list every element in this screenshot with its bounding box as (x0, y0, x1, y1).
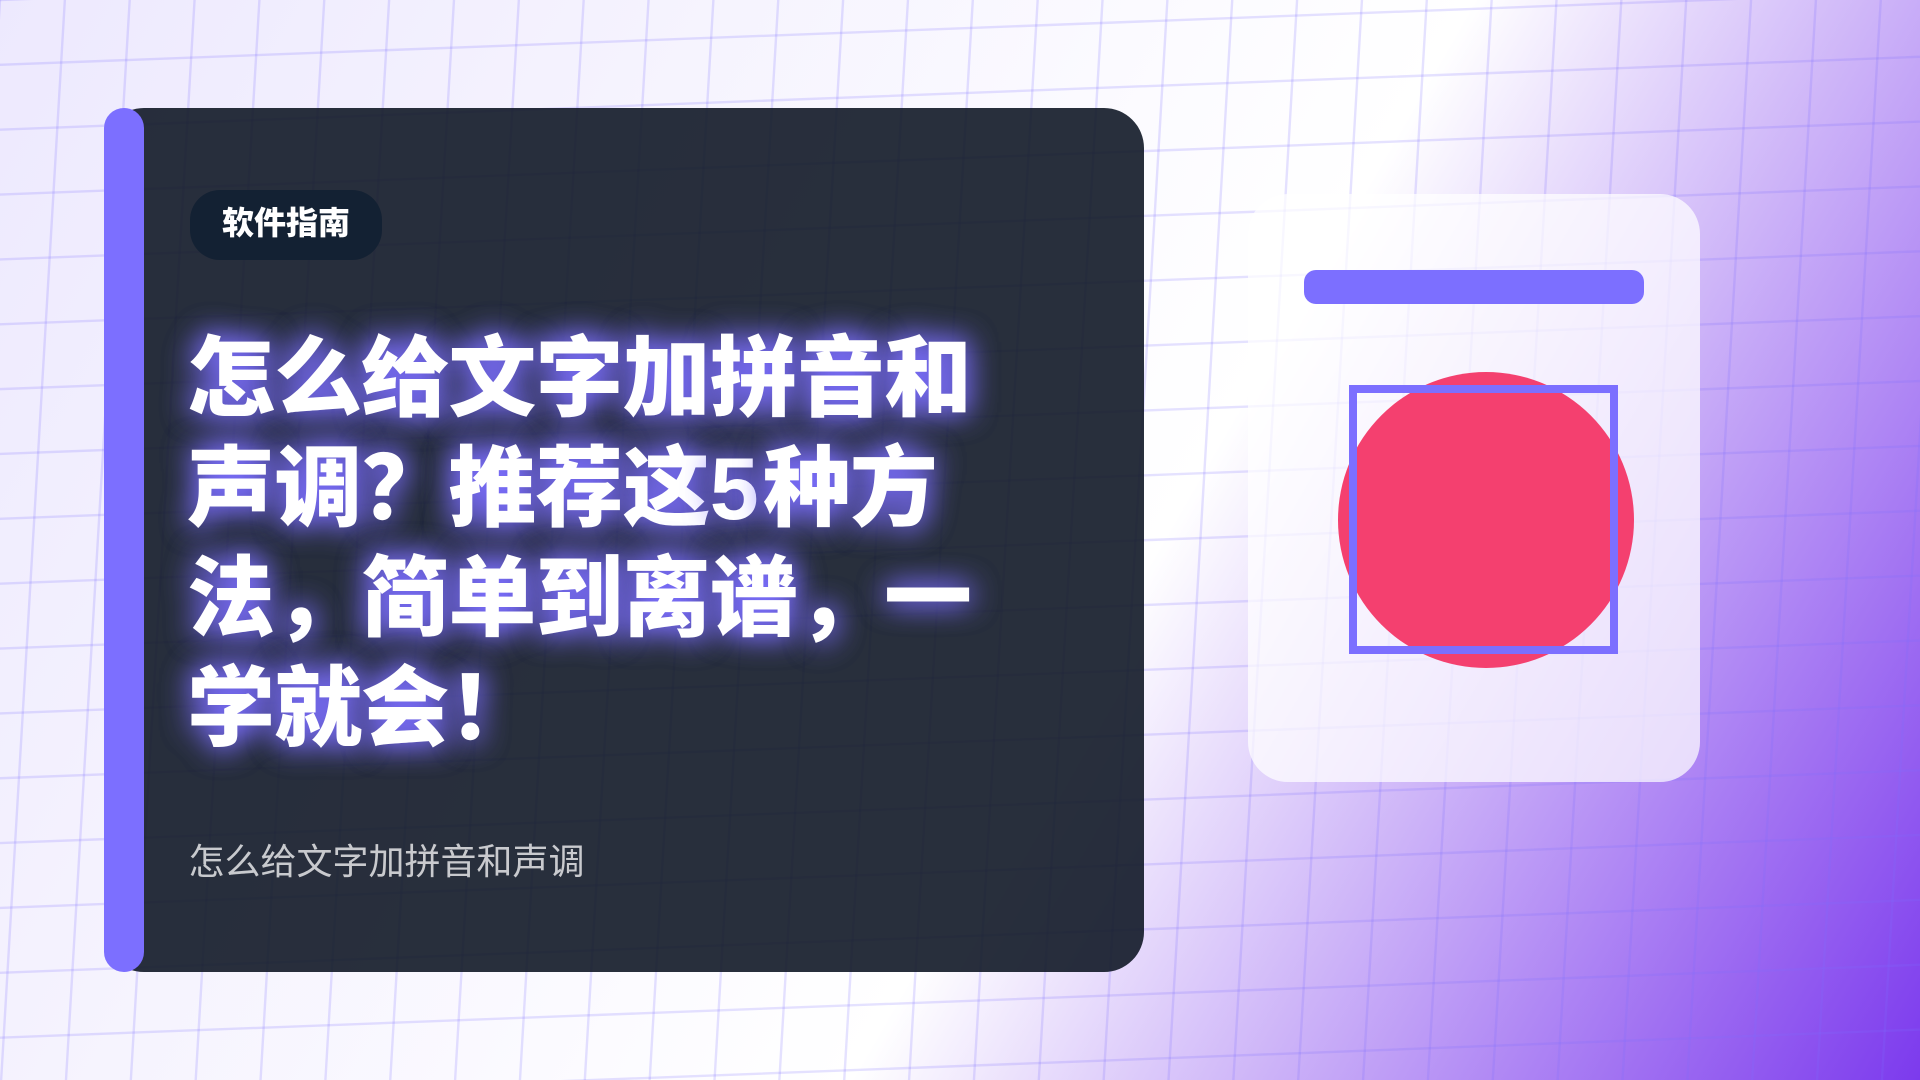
category tag: 软件指南: 软件指南 (222, 205, 350, 241)
title: 法，简单到离谱，一 (187, 549, 971, 648)
subtitle: 怎么给文字加拼音和声调 (188, 841, 585, 882)
panel: illustration card (1248, 194, 1700, 782)
accent bar on card left edge (104, 108, 144, 972)
illustration: purple square outline (1349, 385, 1618, 654)
title: 声调？推荐这5种方 (187, 439, 937, 538)
title: 怎么给文字加拼音和 (187, 329, 971, 428)
category tag: 软件指南 (190, 190, 382, 260)
illustration: purple bar (1304, 270, 1644, 304)
title: 学就会！ (187, 659, 535, 758)
panel: dark title card (104, 108, 1144, 972)
illustration: red circle (1338, 372, 1634, 668)
title (168, 310, 992, 770)
